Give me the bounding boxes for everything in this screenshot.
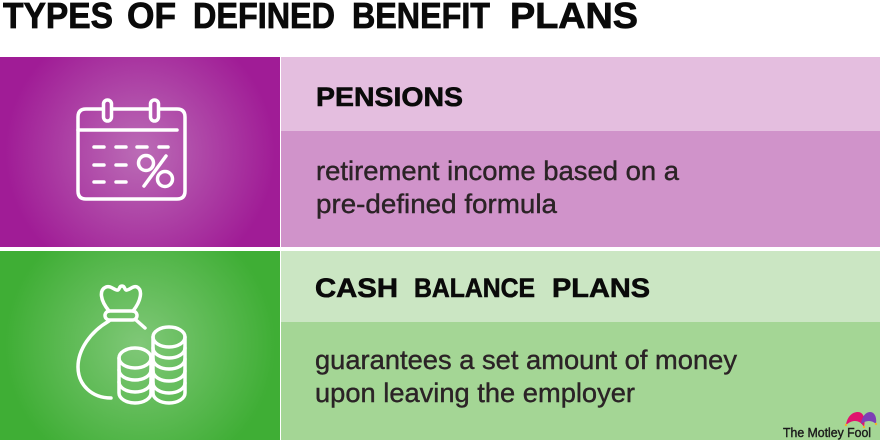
- description: pensions: retirement income based on a: [316, 156, 680, 186]
- icon: money bag with coins: [78, 286, 185, 403]
- description band: cash balance plans: [281, 322, 880, 440]
- logo text: The Motley Fool: [783, 425, 871, 440]
- icon: calendar with percent: [78, 100, 185, 199]
- heading: cash balance plans: PLANS: [552, 273, 650, 303]
- description: cash balance plans: upon leaving the employer: [315, 378, 635, 408]
- description: cash balance plans: guarantees a set amount of money: [315, 345, 738, 375]
- logo: The Motley Fool: [783, 412, 877, 440]
- description: pensions: pre-defined formula: [316, 189, 558, 219]
- icon panel: purple background: [0, 57, 280, 247]
- heading band: pensions: [281, 57, 880, 131]
- heading: cash balance plans: BALANCE: [414, 273, 535, 303]
- description band: pensions: [281, 131, 880, 247]
- icon panel: green background: [0, 251, 280, 440]
- heading band: cash balance plans: [281, 251, 880, 322]
- panel: pensions: [0, 57, 880, 247]
- heading: pensions: PENSIONS: [316, 82, 463, 112]
- heading: cash balance plans: CASH: [315, 273, 398, 303]
- icon: jester hat: [845, 412, 877, 428]
- panel: cash balance plans: [0, 251, 880, 440]
